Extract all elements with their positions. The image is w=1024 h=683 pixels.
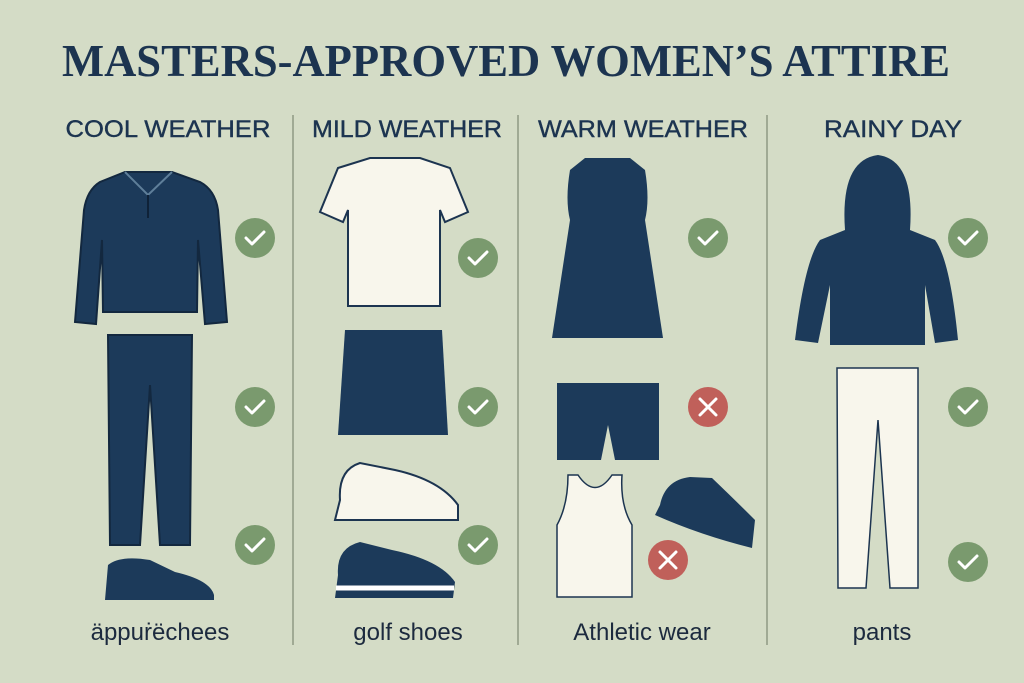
icon: sleeveless dress (552, 158, 663, 338)
footer labels (91, 619, 911, 646)
panel: warm weather (552, 158, 755, 597)
check marks (235, 218, 988, 582)
panel: rainy day (795, 155, 958, 588)
icon: navy shoe (105, 558, 214, 600)
icon: navy skirt (338, 330, 448, 435)
panel: mild weather (320, 158, 468, 598)
cross marks (648, 387, 728, 580)
footer labels: pants (853, 619, 911, 646)
icon: white shoe (335, 463, 458, 520)
icon: navy sneaker (655, 477, 755, 548)
column headings: WARM WEATHER (538, 116, 748, 143)
icon: navy shorts (557, 383, 659, 460)
footer labels: golf shoes (353, 619, 463, 646)
icon: long sleeve polo (75, 172, 227, 324)
column headings: COOL WEATHER (66, 116, 270, 143)
icon: navy shoe (335, 542, 455, 598)
icon: hoodie (795, 155, 958, 345)
panel: cool weather (75, 172, 227, 600)
column headings: MILD WEATHER (312, 116, 502, 143)
icon: navy pants (108, 335, 192, 545)
icon: white polo (320, 158, 468, 306)
title: MASTERS-APPROVED WOMEN’S ATTIRE (62, 35, 950, 86)
column headings: RAINY DAY (824, 116, 962, 143)
footer labels: äppuṙëchees (91, 619, 229, 646)
icon: white pants (837, 368, 918, 588)
icon: white tank (557, 475, 632, 597)
footer labels: Athletic wear (573, 619, 711, 646)
column headings (66, 116, 962, 143)
